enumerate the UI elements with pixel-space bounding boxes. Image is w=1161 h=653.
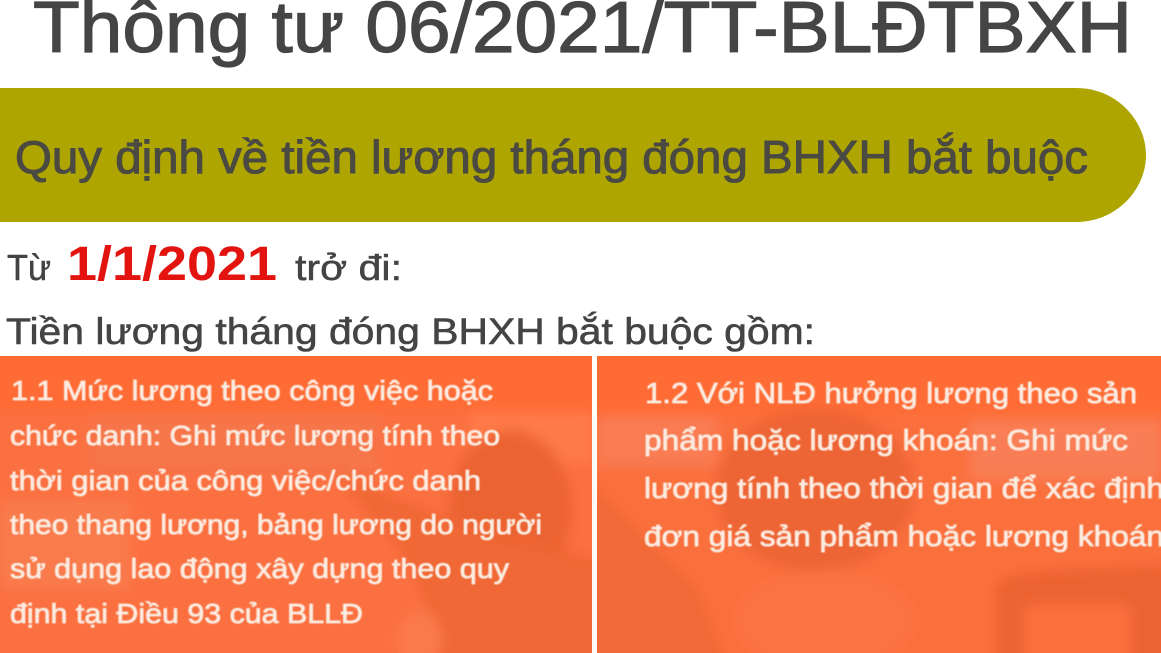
panel text: định tại Điều 93 của BLLĐ	[10, 598, 363, 629]
panel: 1.1 salary by job	[0, 356, 612, 653]
panel text: theo thang lương, bảng lương do người	[10, 509, 542, 540]
panel text: 1.1 Mức lương theo công việc hoặc	[11, 375, 493, 406]
effective date line	[7, 238, 402, 291]
panel text: chức danh: Ghi mức lương tính theo	[10, 420, 500, 451]
panel text	[644, 378, 1161, 553]
panel: 1.2 piece-rate salary	[580, 356, 1161, 653]
panel text	[10, 375, 542, 629]
effective date line: 1/1/2021	[67, 238, 277, 291]
banner text: Quy định về tiền lương tháng đóng BHXH bắt buộc	[15, 131, 1088, 183]
effective date line: trở đi:	[295, 247, 402, 288]
effective date line: Từ	[7, 247, 51, 288]
panel text: thời gian của công việc/chức danh	[10, 465, 481, 496]
panel text: sử dụng lao động xây dựng theo quy	[10, 553, 509, 584]
panel text: lương tính theo thời gian để xác định	[644, 473, 1161, 505]
panel text: 1.2 Với NLĐ hưởng lương theo sản	[645, 378, 1137, 410]
panel text: đơn giá sản phẩm hoặc lương khoán	[644, 521, 1161, 553]
subheading: Tiền lương tháng đóng BHXH bắt buộc gồm:	[6, 311, 815, 352]
banner	[0, 88, 1146, 222]
panel text: phẩm hoặc lương khoán: Ghi mức	[644, 425, 1128, 457]
